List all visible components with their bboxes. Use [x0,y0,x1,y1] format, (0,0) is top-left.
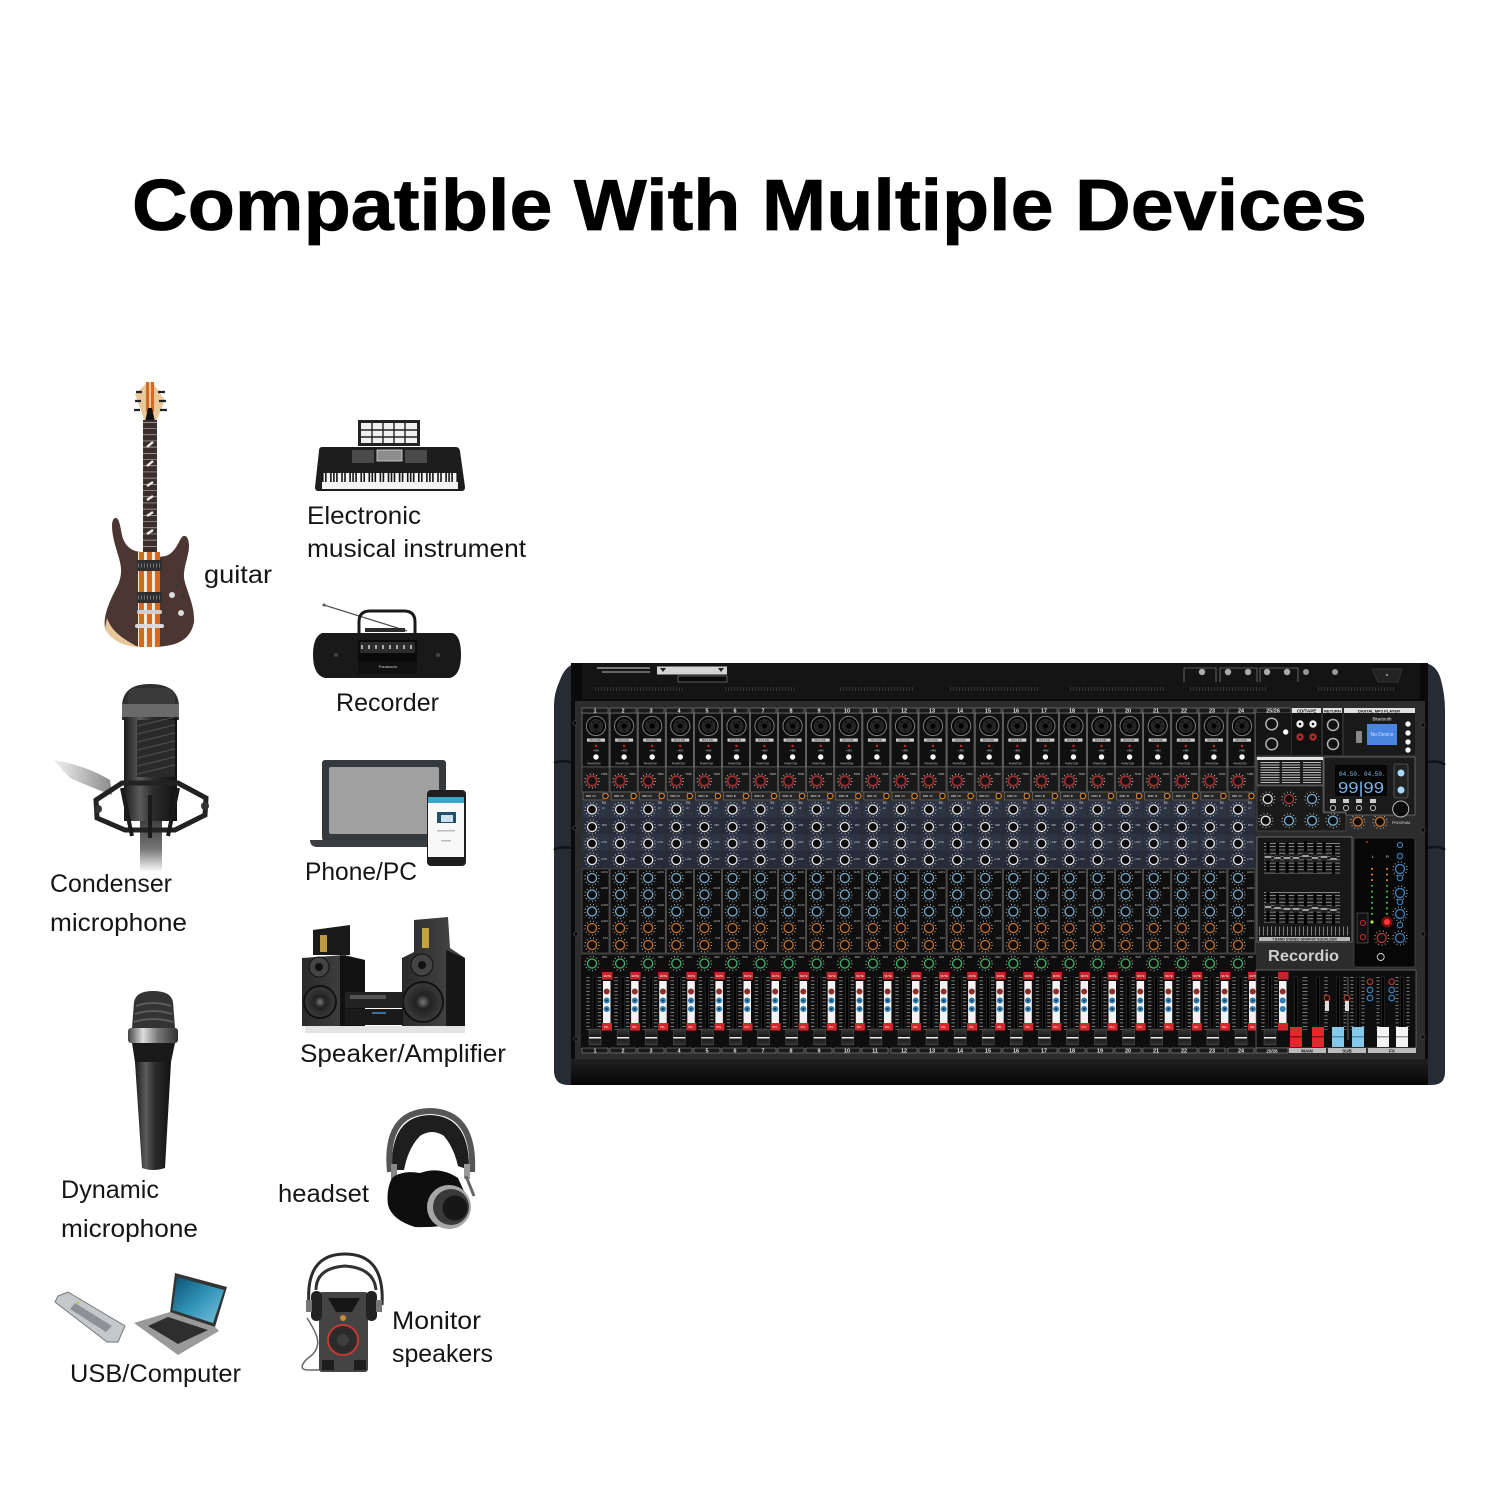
audio mixer [554,663,1445,1085]
brand name: Recordio [1268,948,1339,965]
level meter and master panel [1354,838,1415,967]
device: speakers and amplifier [302,917,465,1033]
effects display panel: 04.50. [1339,771,1361,778]
master section labels: FX [1389,1048,1395,1054]
channel numbers: 20 [1125,709,1131,715]
device: usb stick and laptop [55,1273,227,1355]
channel numbers: 16 [1013,1049,1019,1055]
channel numbers: 5 [705,1049,709,1055]
level meter and master panel: R [1386,854,1389,859]
label: monitor speakers: Monitor [392,1307,481,1335]
label: speaker/amplifier: Speaker/Amplifier [300,1040,506,1068]
mixer face plate [575,701,1425,1059]
channel numbers [593,709,1245,1055]
channel numbers: 16 [1013,709,1019,715]
channel numbers: 2 [621,709,625,715]
channel numbers: 17 [1041,1049,1047,1055]
device: electronic keyboard [315,420,465,491]
channel numbers: 22 [1181,709,1187,715]
channel numbers: 18 [1069,1049,1075,1055]
channel numbers: 19 [1097,709,1103,715]
device: recorder: Panasonic [379,664,397,669]
dark background of fader row [581,955,1256,1048]
master section labels: MAIN [1301,1048,1313,1054]
channel numbers: 13 [929,709,935,715]
level meter and master panel: L [1372,854,1375,859]
device: recorder [313,604,461,678]
label: condenser microphone: Condenser [50,870,172,898]
channel numbers: 12 [901,1049,907,1055]
channel numbers: 9 [817,1049,821,1055]
effects display panel: 04.50. [1364,771,1386,778]
channel numbers: 20 [1125,1049,1131,1055]
master section labels [1256,1048,1416,1054]
input block 25/26: 25/26 [1266,709,1280,715]
channel numbers: 23 [1209,709,1215,715]
white fx faders [1367,977,1408,1047]
label: electronic musical instrument [307,502,526,563]
channel numbers: 2 [621,1049,625,1055]
fader 25/26 [1263,972,1288,1045]
channel numbers: 15 [985,709,991,715]
label: usb/computer: USB/Computer [70,1360,241,1388]
channel numbers: 21 [1153,709,1159,715]
device: monitor speaker with headphones [302,1254,382,1372]
mixer black chassis [571,663,1428,1085]
channel numbers: 4 [677,709,681,715]
device: headset [388,1111,474,1229]
channel numbers: 10 [844,1049,850,1055]
channel numbers: 10 [844,709,850,715]
channel numbers: 7 [761,1049,765,1055]
master rotary knobs [1257,786,1387,831]
channel numbers: 13 [929,1049,935,1055]
effects display panel: PROGRAM [1392,821,1410,825]
label: headset: headset [278,1180,369,1208]
mixer lower lip [571,1059,1428,1085]
label: recorder: Recorder [336,689,439,717]
label: condenser microphone: microphone [50,909,187,937]
device: dynamic microphone [128,991,178,1170]
channel numbers: 24 [1238,709,1245,715]
title: Compatible With Multiple Devices [132,166,1367,246]
input block RETURN [1323,708,1342,755]
channel numbers: 18 [1069,709,1075,715]
channel numbers: 3 [649,709,653,715]
device: phone and laptop [310,760,466,866]
channel numbers: 1 [593,709,597,715]
channel numbers: 3 [649,1049,653,1055]
channel numbers: 1 [593,1049,597,1055]
rear top panel [582,663,1420,699]
channel numbers: 11 [872,1049,878,1055]
label: monitor speakers [392,1307,493,1368]
master section labels: SUB [1342,1048,1352,1054]
red main faders [1290,977,1326,1047]
channel numbers: 12 [901,709,907,715]
label: monitor speakers: speakers [392,1340,493,1368]
channel numbers: 7 [761,709,765,715]
channel numbers: 23 [1209,1049,1215,1055]
label: dynamic microphone [61,1176,198,1243]
label: electronic musical instrument: Electronic [307,502,421,530]
graphic equalizer [1257,837,1352,942]
cyan sub faders [1324,977,1364,1047]
channel numbers: 8 [789,709,793,715]
label: guitar: guitar [204,561,272,589]
channel numbers: 24 [1238,1049,1245,1055]
input block 25/26 [1256,708,1291,755]
channel numbers: 15 [985,1049,991,1055]
channel numbers: 17 [1041,709,1047,715]
MP3 player block: DIGITAL MP3 PLAYER [1358,708,1400,713]
channel numbers: 14 [957,709,964,715]
effects display panel: 99|99 [1338,780,1384,797]
label: dynamic microphone: Dynamic [61,1176,159,1204]
MP3 player block: Bluetooth [1372,716,1392,722]
mixer side caps [554,663,1445,1085]
channel numbers: 21 [1153,1049,1159,1055]
input block CD/TAPE [1292,708,1321,755]
label: phone/pc: Phone/PC [305,858,417,886]
channel numbers: 6 [733,709,737,715]
label: dynamic microphone: microphone [61,1215,198,1243]
channel numbers: 8 [789,1049,793,1055]
channel numbers: 6 [733,1049,737,1055]
channel numbers: 9 [817,709,821,715]
effects display panel [1324,757,1415,825]
label: condenser microphone [50,870,187,937]
MP3 player block: No Device [1370,732,1394,738]
device: condenser microphone [53,684,209,872]
channel number boxes [582,708,1254,1053]
label: electronic musical instrument: musical instrument [307,535,526,563]
channel numbers: 22 [1181,1049,1187,1055]
input block CD/TAPE: CD/TAPE [1297,708,1316,713]
graphic equalizer: 7 BAND STEREO GRAPHIC EQUALIZER [1272,937,1337,941]
channel strips 1-24 [582,713,1258,1045]
channel numbers: 14 [957,1049,964,1055]
effects list table [1257,757,1323,785]
face screws [573,721,1425,1041]
channel numbers: 11 [872,709,878,715]
device: guitar [105,382,194,647]
channel numbers: 5 [705,709,709,715]
MP3 player block [1344,708,1415,755]
master fader section [1256,970,1416,1054]
channel numbers: 19 [1097,1049,1103,1055]
master section labels: 25/26 [1266,1049,1278,1054]
channel numbers: 4 [677,1049,681,1055]
input block RETURN: RETURN [1324,708,1341,713]
